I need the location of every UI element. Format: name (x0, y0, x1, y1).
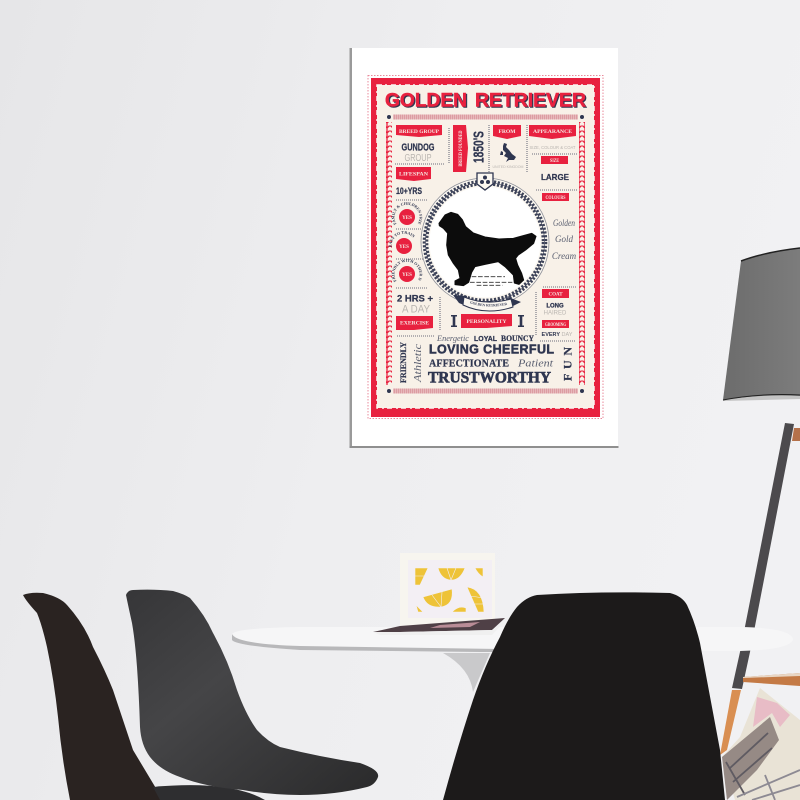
panel: lifespan (396, 167, 431, 196)
panel: breed founded: 1850'S (470, 131, 488, 163)
table (232, 627, 793, 692)
ribbon banner (453, 295, 521, 312)
panel: coat (542, 289, 569, 316)
panel: grooming (542, 320, 573, 338)
chair left (23, 593, 163, 800)
panel: size: LARGE (541, 172, 569, 182)
poster border (368, 76, 603, 418)
personality word cloud: Athletic (413, 344, 424, 383)
lamp stand (720, 423, 800, 755)
panel: size (541, 156, 569, 182)
title: RETRIEVER (475, 90, 586, 112)
panel: colours: COLOURS (546, 196, 566, 201)
panel: lifespan: 10+YRS (396, 186, 422, 196)
icon: crest shield (477, 173, 493, 190)
icon: bone left (451, 315, 457, 327)
panel: colours: Cream (552, 251, 577, 261)
title: GOLDEN (386, 90, 468, 112)
panel: from: FROM (498, 130, 516, 135)
panel: coat: COAT (548, 292, 563, 297)
panel: personality banner: PERSONALITY (466, 320, 507, 325)
panel: coat: LONG (546, 304, 564, 310)
panel: breed founded: BREED FOUNDED (459, 130, 464, 166)
badge: friendly with other dogs: FRIENDLY WITH OTHER DOGS (392, 259, 422, 282)
chair front (443, 592, 725, 800)
panel: exercise: 2 HRS + (397, 294, 433, 304)
badge: family friendly: YES (402, 216, 412, 221)
panel: grooming: GROOMING (545, 323, 566, 328)
lamp shade (723, 248, 800, 401)
icon: dog silhouette (439, 212, 536, 286)
title: RETRIEVER (476, 90, 587, 112)
panel: exercise: A DAY (402, 304, 431, 316)
panel: breed group: BREED GROUP (399, 130, 439, 135)
personality word cloud (399, 334, 574, 386)
panel: appearance: APPEARANCE (533, 130, 573, 135)
canvas print (350, 48, 618, 448)
picture frame with lemons (400, 553, 495, 627)
badge: family friendly: FAMILY & CHILDREN FRIENDLY (392, 202, 422, 226)
personality word cloud: LOYAL (474, 336, 498, 343)
panel: breed group: GUNDOG (402, 142, 435, 154)
panel: breed group: GROUP (404, 153, 432, 164)
panel: size: SIZE (550, 159, 560, 164)
chair middle (126, 590, 378, 800)
panel: from (492, 125, 524, 169)
personality word cloud: FRIENDLY (399, 342, 408, 383)
badge: friendly with other dogs: YES (402, 273, 412, 278)
badge: easy to train: EASY TO TRAIN (388, 231, 415, 248)
top stripe (393, 114, 578, 120)
personality word cloud: TRUSTWORTHY (428, 370, 551, 386)
personality word cloud: FUN (560, 347, 574, 381)
badge: easy to train: YES (399, 245, 409, 250)
personality word cloud: Energetic (436, 334, 469, 343)
panel: appearance (529, 125, 576, 150)
dividers (395, 125, 577, 341)
personality word cloud: LOVING CHEERFUL (429, 342, 554, 356)
panel: breed group (396, 125, 442, 164)
personality word cloud: AFFECTIONATE (429, 358, 509, 370)
magazine (373, 618, 506, 635)
badge: family friendly (392, 202, 422, 226)
corner stars (387, 115, 584, 393)
panel: exercise: EXERCISE (400, 322, 430, 326)
left chevron column (386, 122, 392, 385)
personality word cloud: Patient (517, 358, 554, 370)
icon: uk map (500, 143, 516, 162)
ribbon banner: GOLDEN RETRIEVER (470, 301, 508, 307)
panel: personality banner (461, 314, 512, 328)
badge: friendly with other dogs (392, 259, 422, 282)
dog medallion (421, 178, 549, 306)
panel: breed founded (453, 125, 488, 172)
panel: coat: HAIRED (544, 310, 567, 316)
badge: easy to train (388, 231, 415, 254)
panel: from: UNITED KINGDOM (492, 165, 524, 169)
title (385, 90, 587, 112)
panel: grooming: EVERY DAY (542, 332, 573, 338)
panel: exercise (396, 294, 433, 330)
panel: colours: Golden (553, 218, 575, 228)
cushion (722, 688, 800, 800)
panel: appearance: SIZE, COLOUR & COAT (530, 145, 576, 150)
panel: colours (542, 193, 577, 261)
title: GOLDEN (385, 90, 467, 112)
panel: lifespan: LIFESPAN (399, 172, 428, 178)
bottom stripe (393, 388, 578, 394)
right chevron column (579, 122, 585, 385)
personality word cloud: BOUNCY (501, 334, 534, 343)
panel: colours: Gold (555, 234, 574, 244)
icon: bone right (518, 315, 524, 327)
